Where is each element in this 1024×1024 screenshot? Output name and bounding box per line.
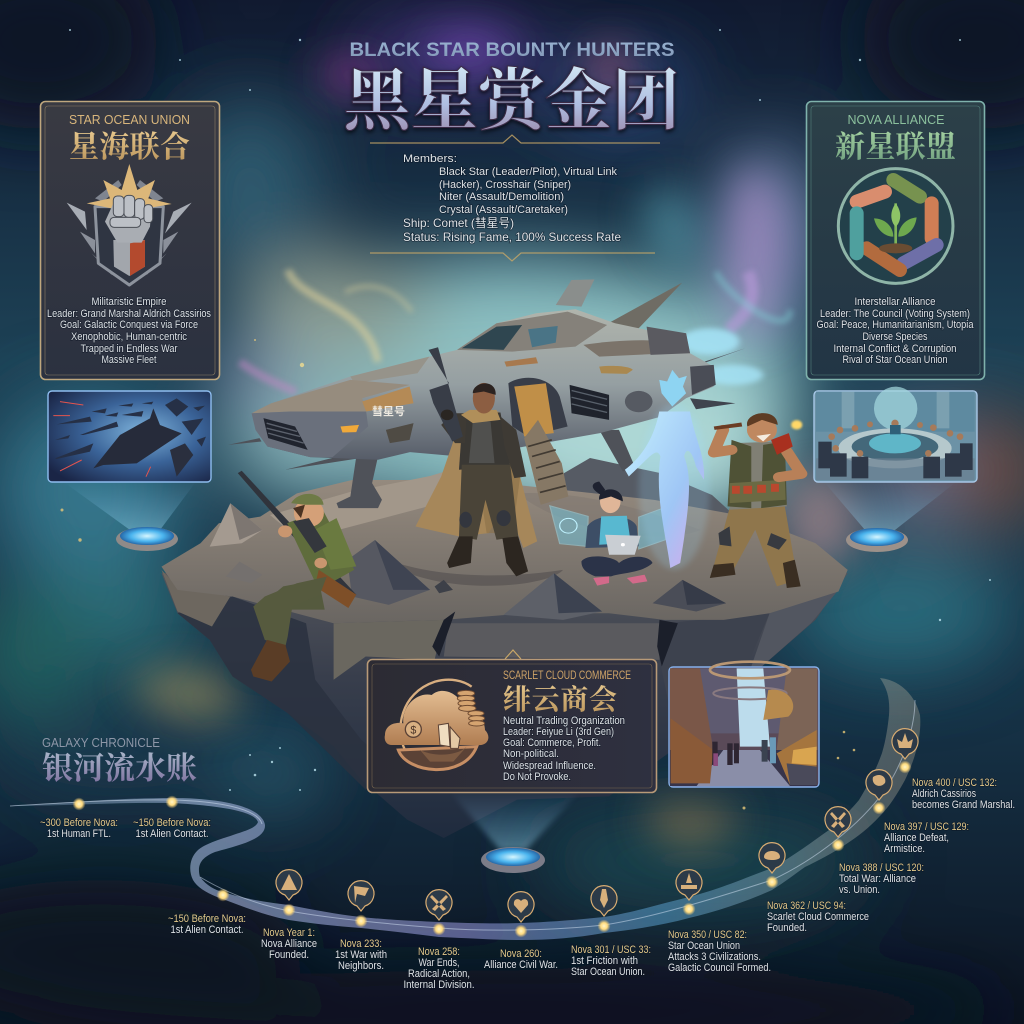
title: 黑星赏金团 — [343, 63, 680, 139]
event: Nova 301: Star Ocean Union. — [571, 966, 645, 978]
event: ~150 Before Nova first — [133, 817, 211, 840]
event: Nova 388: Nova 388 / USC 120: — [839, 862, 924, 874]
event: Nova 301: 1st Friction with — [571, 955, 638, 967]
team divider — [370, 253, 655, 261]
text: Nova Alliance facts: Interstellar Alliance — [854, 296, 936, 308]
hologram projector pad center — [450, 792, 580, 873]
event: Nova 388: vs. Union. — [839, 884, 880, 896]
text: Scarlet Cloud facts: Widespread Influence. — [503, 760, 596, 772]
text: Nova Alliance facts: Rival of Star Ocean Union — [842, 354, 948, 366]
text: Star Ocean facts: Xenophobic, Human-centric — [71, 331, 187, 343]
ship name: 彗星号 — [372, 404, 405, 418]
event: Nova 388 — [839, 862, 924, 896]
event: Nova 260 — [484, 948, 558, 971]
timeline pin icons — [276, 729, 918, 922]
text: Scarlet Cloud facts: Goal: Commerce, Profit. — [503, 737, 601, 749]
text: Star Ocean facts: Militaristic Empire — [92, 296, 166, 308]
panel: Star Ocean Union — [40, 102, 220, 380]
event: Nova 400 — [912, 777, 1015, 811]
heading: Galaxy Chronicle: 银河流水账 — [42, 751, 197, 786]
event: Nova 233: 1st War with — [335, 949, 387, 961]
text: Scarlet Cloud facts: Non-political. — [503, 748, 559, 760]
text: Star Ocean facts: Goal: Galactic Conquest via Force — [60, 319, 198, 331]
heading: Star Ocean Union: 星海联合 — [69, 131, 190, 164]
event: Nova 350: Nova 350 / USC 82: — [668, 929, 747, 941]
boarding stairs — [524, 420, 568, 505]
engine glow — [680, 328, 739, 355]
text: Scarlet Cloud facts: Do Not Provoke. — [503, 771, 571, 783]
hologram: council chamber image — [814, 387, 977, 482]
floating rock island — [161, 458, 848, 838]
event: ~150 Before Nova first: ~150 Before Nova: — [133, 817, 211, 829]
event: Nova 388: Total War: Alliance — [839, 873, 916, 885]
event: Nova Year 1 — [261, 927, 317, 961]
heading: Nova Alliance — [835, 112, 956, 164]
heading: Nova Alliance: NOVA ALLIANCE — [848, 112, 945, 127]
text: Star Ocean facts: Massive Fleet — [102, 354, 156, 366]
event: Nova 350: Star Ocean Union — [668, 940, 740, 952]
text: Nova Alliance facts: Goal: Peace, Humanitarianism, Utopia — [816, 319, 974, 331]
text: Scarlet Cloud facts: Leader: Feiyue Li (3rd Gen) — [503, 726, 614, 738]
event: Nova 301: Nova 301 / USC 33: — [571, 944, 651, 956]
text: Star Ocean facts — [47, 296, 211, 366]
sniper lower legs — [251, 577, 327, 681]
event: Nova 260: Nova 260: — [500, 948, 542, 960]
text: Star Ocean facts: Trapped in Endless War — [80, 343, 178, 355]
hologram projector pad right — [825, 483, 955, 552]
timeline nodes and pins — [72, 729, 918, 938]
event: Nova 397: Nova 397 / USC 129: — [884, 821, 969, 833]
icon: cloud, coins and ship emblem: $ — [410, 724, 416, 736]
event: ~300 Before Nova — [40, 817, 118, 840]
event: Nova Year 1: Nova Alliance — [261, 938, 317, 950]
heading: Star Ocean Union: STAR OCEAN UNION — [69, 112, 190, 127]
hologram: fleet image — [48, 391, 211, 482]
timeline ribbon — [10, 678, 920, 940]
heading: Scarlet Cloud Commerce — [503, 668, 631, 716]
team info text: Crystal (Assault/Caretaker) — [439, 204, 568, 216]
event: Nova 397: Armistice. — [884, 843, 925, 855]
event: ~150 Before Nova second: 1st Alien Contact. — [170, 924, 244, 936]
hologram Crystal — [625, 370, 710, 570]
timeline pin glyphs — [281, 733, 913, 913]
image: trade station market — [669, 662, 819, 787]
event: Nova 362: Nova 362 / USC 94: — [767, 900, 846, 912]
title: BLACK STAR BOUNTY HUNTERS — [350, 40, 674, 61]
event: Nova 233 — [335, 938, 387, 972]
event: ~150 Before Nova first: 1st Alien Contact. — [136, 828, 208, 840]
event: ~300 Before Nova: ~300 Before Nova: — [40, 817, 118, 829]
leader Black Star — [416, 347, 537, 576]
event: Nova 233: Neighbors. — [338, 960, 384, 972]
text: Nova Alliance facts: Diverse Species — [862, 331, 928, 343]
title divider — [370, 135, 660, 143]
text: Nova Alliance facts: Internal Conflict & Corruption — [834, 343, 956, 355]
heading: Galaxy Chronicle — [42, 735, 197, 786]
event: Nova 397 — [884, 821, 969, 855]
text: Nova Alliance facts: Leader: The Council (Voting System) — [820, 308, 970, 320]
team info text: (Hacker), Crosshair (Sniper) — [439, 179, 571, 191]
event: Nova 260: Alliance Civil War. — [484, 959, 558, 971]
starfield — [60, 29, 991, 810]
event: Nova 400: Nova 400 / USC 132: — [912, 777, 997, 789]
event: ~150 Before Nova second: ~150 Before Nova: — [168, 913, 246, 925]
icon: armored fist star emblem — [67, 164, 192, 285]
event: Nova 258: War Ends, — [418, 957, 460, 969]
event: Nova 258: Internal Division. — [404, 979, 474, 991]
event: Nova 362 — [767, 900, 869, 934]
team info text: Ship: Comet (彗星号) — [403, 216, 514, 230]
panel: Nova Alliance — [806, 102, 984, 380]
heading: Star Ocean Union — [69, 112, 190, 164]
ship legs — [228, 430, 635, 508]
aurora and dust swirls — [240, 270, 790, 392]
event: Nova 350 — [668, 929, 771, 974]
event: Nova Year 1: Nova Year 1: — [263, 927, 315, 939]
event: Nova 362: Scarlet Cloud Commerce — [767, 911, 869, 923]
team info text: Black Star (Leader/Pilot), Virtual Link — [439, 166, 617, 178]
sniper Crosshair — [238, 471, 356, 610]
panel: Scarlet Cloud Commerce — [368, 650, 656, 792]
text: Scarlet Cloud facts — [503, 715, 625, 783]
text: Star Ocean facts: Leader: Grand Marshal Aldrich Cassirios — [47, 308, 211, 320]
event: Nova 362: Founded. — [767, 922, 807, 934]
event: Nova Year 1: Founded. — [269, 949, 309, 961]
hologram projector pad left — [65, 483, 195, 551]
heading: Nova Alliance: 新星联盟 — [835, 131, 956, 164]
spaceship Comet — [228, 279, 802, 610]
team info text: Members: — [403, 153, 457, 165]
event: ~300 Before Nova: 1st Human FTL. — [47, 828, 111, 840]
hull — [252, 309, 714, 460]
text: Scarlet Cloud facts: Neutral Trading Organization — [503, 715, 625, 727]
timeline labels — [40, 777, 1015, 991]
heading: Galaxy Chronicle: GALAXY CHRONICLE — [42, 735, 160, 750]
event: Nova 301 — [571, 944, 651, 978]
team info text: Status: Rising Fame, 100% Success Rate — [403, 230, 621, 244]
event: Nova 258 — [404, 946, 474, 991]
icon: joined hands and sprout — [838, 169, 953, 283]
event: Nova 350: Galactic Council Formed. — [668, 962, 771, 974]
event: Nova 258: Nova 258: — [418, 946, 460, 958]
event: Nova 350: Attacks 3 Civilizations. — [668, 951, 761, 963]
event: Nova 397: Alliance Defeat, — [884, 832, 949, 844]
event: Nova 258: Radical Action, — [408, 968, 470, 980]
team info text: Niter (Assault/Demolition) — [439, 191, 564, 203]
team info text — [403, 153, 621, 244]
hacker Virtual Link — [550, 481, 666, 586]
demolition Niter — [710, 413, 802, 588]
event: Nova 400: Aldrich Cassirios — [912, 788, 976, 800]
event: ~150 Before Nova second — [168, 913, 246, 936]
event: Nova 233: Nova 233: — [340, 938, 382, 950]
text: Nova Alliance facts — [816, 296, 974, 366]
icon: cloud, coins and ship emblem — [385, 680, 488, 770]
heading: Scarlet Cloud Commerce: 绯云商会 — [503, 684, 617, 716]
heading: Scarlet Cloud Commerce: SCARLET CLOUD COMMERCE — [503, 668, 631, 682]
